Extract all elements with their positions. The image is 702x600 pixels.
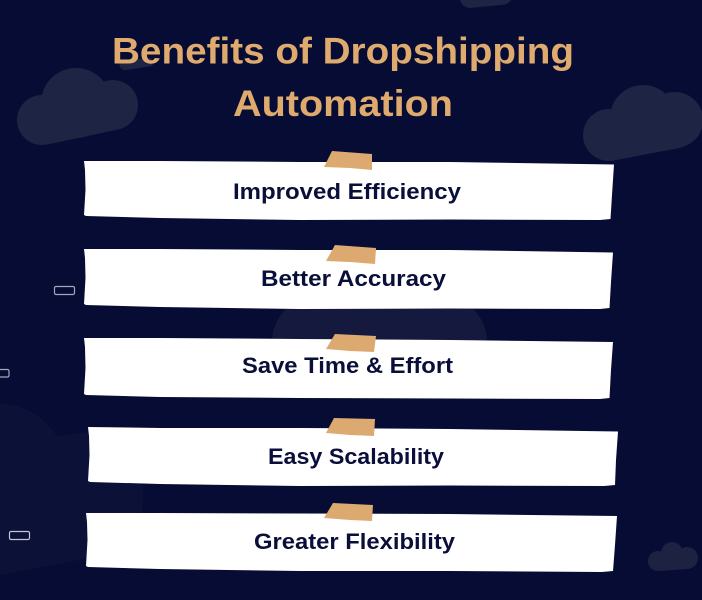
cloud: large lower left (0, 403, 143, 575)
label: Easy Scalability (268, 444, 444, 469)
decorative outlined rectangle: lower (10, 532, 30, 540)
tape (326, 418, 375, 436)
title: Benefits of Dropshipping (112, 30, 574, 72)
cloud: lower right (648, 542, 698, 571)
cloud: center behind banners (272, 296, 487, 388)
decorative outlined rectangle: middle (0, 370, 9, 377)
tape (326, 245, 376, 264)
tape (324, 151, 372, 170)
decorative outlined rectangle: upper (54, 286, 74, 294)
cloud: upper left (17, 68, 138, 145)
banner: Easy Scalability (88, 418, 618, 486)
label: Better Accuracy (261, 266, 447, 291)
label: Greater Flexibility (254, 529, 456, 554)
banner: Improved Efficiency (84, 151, 614, 220)
title (112, 30, 574, 124)
label: Improved Efficiency (233, 179, 462, 204)
banner: Greater Flexibility (86, 503, 617, 572)
label: Save Time & Effort (242, 353, 454, 378)
banner: Better Accuracy (84, 245, 613, 309)
title: Automation (233, 83, 453, 124)
cloud: upper right (583, 85, 702, 161)
cloud: small behind title (119, 58, 153, 70)
tape (324, 503, 373, 521)
tape (326, 334, 376, 352)
banner: Save Time & Effort (84, 334, 613, 399)
cloud: top edge (460, 0, 511, 8)
